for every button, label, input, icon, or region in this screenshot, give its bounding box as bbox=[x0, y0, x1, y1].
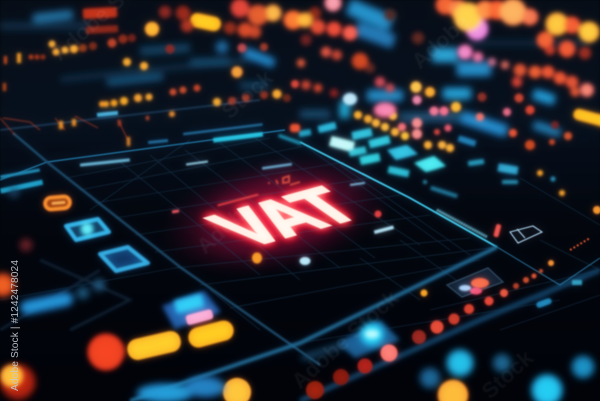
red circuit traces bbox=[0, 116, 128, 140]
orange light, bottom centre bbox=[438, 380, 468, 401]
glowing orange pills and lights, bottom left bbox=[0, 274, 251, 401]
watermarks: Adobe Stock bbox=[287, 285, 404, 394]
pale dot bbox=[343, 93, 357, 105]
blurred left controls bbox=[9, 188, 105, 315]
VAT title: VAT bbox=[192, 178, 379, 258]
blue ring button bbox=[66, 219, 109, 240]
large pill, top bbox=[189, 12, 222, 32]
dashed bright line bbox=[437, 210, 487, 237]
orange ring button bbox=[45, 196, 70, 210]
panel edges bbox=[0, 100, 600, 401]
right-side small elements bbox=[493, 206, 600, 309]
square blue button bbox=[100, 247, 148, 271]
big bokeh cluster, top right bbox=[436, 0, 599, 96]
blurred blue bands, top bbox=[0, 0, 590, 137]
watermarks: Adobe bbox=[192, 194, 259, 259]
orange pill, right edge bbox=[572, 108, 600, 129]
square icon outline bbox=[510, 226, 542, 243]
cyan keys cluster bbox=[278, 122, 556, 198]
blue keypad with pink key bbox=[162, 291, 221, 329]
status dots below VAT bbox=[252, 252, 428, 296]
small red device bbox=[447, 268, 503, 297]
orange and red bokeh dots, upper left bbox=[3, 7, 300, 146]
vertical stock credit: Adobe Stock | #1242478024 bbox=[10, 260, 21, 391]
panel grid lines bbox=[0, 138, 600, 365]
watermarks: Adobe bbox=[407, 9, 474, 74]
pink blob bbox=[374, 103, 396, 117]
blue glowing pad bbox=[338, 320, 400, 358]
red marks above VAT bbox=[172, 176, 382, 218]
orange and pink bokeh, centre right bbox=[354, 82, 572, 196]
bokeh cluster, top centre bbox=[159, 0, 424, 97]
red dot row bbox=[306, 260, 554, 399]
blurred blue lights, bottom bbox=[137, 334, 594, 401]
watermarks: Stock bbox=[217, 65, 278, 124]
red glow behind VAT bbox=[145, 131, 405, 299]
cyan labels at panel top bbox=[0, 111, 394, 234]
